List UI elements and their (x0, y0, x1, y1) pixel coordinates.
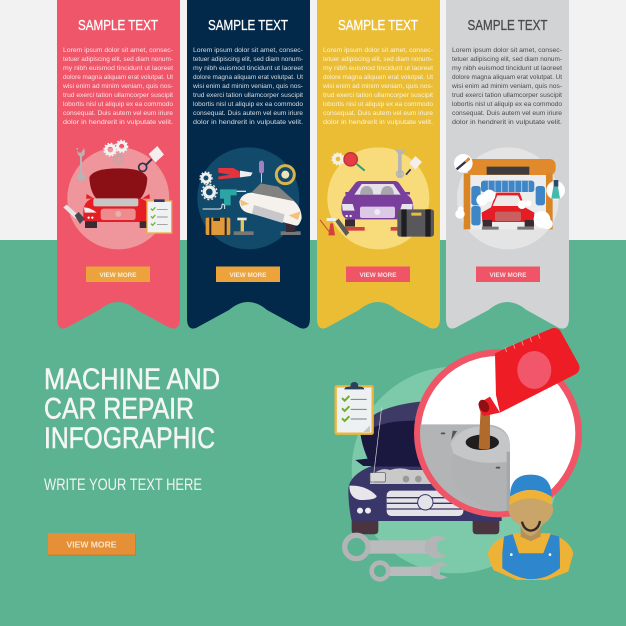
yellow banner heading: SAMPLE TEXT (338, 17, 418, 34)
icon: ring with engine and oil bottle (417, 328, 580, 517)
yellow banner body text: my nibh euismod tincidunt ut laoreet (323, 65, 433, 72)
yellow banner body text: dolor in hendrerit in vulputate velit. (323, 119, 433, 126)
red banner body text: my nibh euismod tincidunt ut laoreet (63, 65, 173, 72)
yellow banner body text: Lorem ipsum dolor sit amet, consec- (323, 47, 433, 54)
red banner body text: Lorem ipsum dolor sit amet, consec- (63, 47, 173, 54)
navy banner illustration: car on lift with tools (197, 147, 302, 249)
grey banner body text: trud exerci tation ullamcorper suscipit (452, 92, 562, 99)
panel: navy banner (187, 0, 310, 329)
yellow banner body text: wisi enim ad minim veniam, quis nos- (322, 83, 433, 90)
grey banner button: VIEW MORE (490, 272, 527, 279)
main illustration: oil change (336, 328, 580, 580)
title: INFOGRAPHIC (44, 422, 215, 455)
yellow banner body text: trud exerci tation ullamcorper suscipit (323, 92, 433, 99)
navy banner body text: dolor in hendrerit in vulputate velit. (193, 119, 303, 126)
title: MACHINE AND (44, 363, 220, 396)
grey banner body text: lobortis nisl ut aliquip ex ea commodo (452, 101, 562, 108)
grey banner body text: wisi enim ad minim veniam, quis nos- (451, 83, 562, 90)
grey banner illustration: car wash (454, 147, 565, 249)
red banner body text: dolore magna aliquam erat volutpat. Ut (63, 74, 173, 81)
title: CAR REPAIR (44, 392, 194, 426)
yellow banner body text (322, 47, 433, 126)
grey banner body text: my nibh euismod tincidunt ut laoreet (452, 65, 562, 72)
grey banner body text: Lorem ipsum dolor sit amet, consec- (452, 47, 562, 54)
red banner body text: lobortis nisl ut aliquip ex ea commodo (63, 101, 173, 108)
yellow banner shape (317, 0, 440, 329)
grey banner heading: SAMPLE TEXT (468, 17, 548, 34)
panel: red banner (57, 0, 180, 329)
grey banner body text: dolor in hendrerit in vulputate velit. (452, 119, 562, 126)
yellow banner body text: consequat. Duis autem vel eum iriure (323, 110, 433, 117)
navy banner body text: my nibh euismod tincidunt ut laoreet (193, 65, 303, 72)
red banner heading: SAMPLE TEXT (78, 17, 158, 34)
red banner body text: tetuer adipiscing elit, sed diam nonum- (63, 56, 173, 63)
red banner button (86, 266, 150, 282)
red banner shape (57, 0, 180, 329)
red banner button: VIEW MORE (100, 272, 137, 279)
grey banner button (476, 266, 540, 282)
navy banner body text: Lorem ipsum dolor sit amet, consec- (193, 47, 303, 54)
navy banner body text: consequat. Duis autem vel eum iriure (193, 110, 303, 117)
panel: grey banner (446, 0, 569, 329)
grey banner shape (446, 0, 569, 329)
background: light top band (0, 0, 626, 240)
red banner body text: dolor in hendrerit in vulputate velit. (63, 119, 173, 126)
red banner illustration: car with open hood (63, 140, 172, 249)
navy banner body text: dolore magna aliquam erat volutpat. Ut (193, 74, 303, 81)
red banner body text: wisi enim ad minim veniam, quis nos- (62, 83, 173, 90)
icon: car with open hood (348, 402, 502, 534)
red banner body text: trud exerci tation ullamcorper suscipit (63, 92, 173, 99)
navy banner shape (187, 0, 310, 329)
icon: mechanic (488, 475, 573, 580)
main button (48, 533, 136, 556)
yellow banner illustration: purple car and toolbox (320, 147, 434, 249)
red banner body text (62, 47, 173, 126)
background: green lower area (0, 240, 626, 626)
navy banner body text: lobortis nisl ut aliquip ex ea commodo (193, 101, 303, 108)
yellow banner button: VIEW MORE (360, 272, 397, 279)
navy banner button: VIEW MORE (230, 272, 267, 279)
navy banner body text: tetuer adipiscing elit, sed diam nonum- (193, 56, 303, 63)
navy banner body text (192, 47, 303, 126)
grey banner body text: dolore magna aliquam erat volutpat. Ut (452, 74, 562, 81)
icon: oil bottle (477, 328, 580, 416)
navy banner button (216, 266, 280, 282)
red banner body text: consequat. Duis autem vel eum iriure (63, 110, 173, 117)
panel: yellow banner (317, 0, 440, 329)
navy banner heading: SAMPLE TEXT (208, 17, 288, 34)
title (44, 363, 220, 455)
grey banner body text: consequat. Duis autem vel eum iriure (452, 110, 562, 117)
yellow banner body text: lobortis nisl ut aliquip ex ea commodo (323, 101, 433, 108)
grey banner body text (451, 47, 562, 126)
yellow banner body text: tetuer adipiscing elit, sed diam nonum- (323, 56, 433, 63)
yellow banner button (346, 266, 410, 282)
subtitle: WRITE YOUR TEXT HERE (44, 475, 202, 494)
pale green circle (352, 367, 558, 573)
navy banner body text: wisi enim ad minim veniam, quis nos- (192, 83, 303, 90)
oil stream (479, 409, 490, 449)
icon: wrenches (345, 535, 448, 579)
yellow banner body text: dolore magna aliquam erat volutpat. Ut (323, 74, 433, 81)
icon: clipboard checklist (336, 382, 373, 434)
navy banner body text: trud exerci tation ullamcorper suscipit (193, 92, 303, 99)
main button: VIEW MORE (66, 540, 117, 550)
grey banner body text: tetuer adipiscing elit, sed diam nonum- (452, 56, 562, 63)
